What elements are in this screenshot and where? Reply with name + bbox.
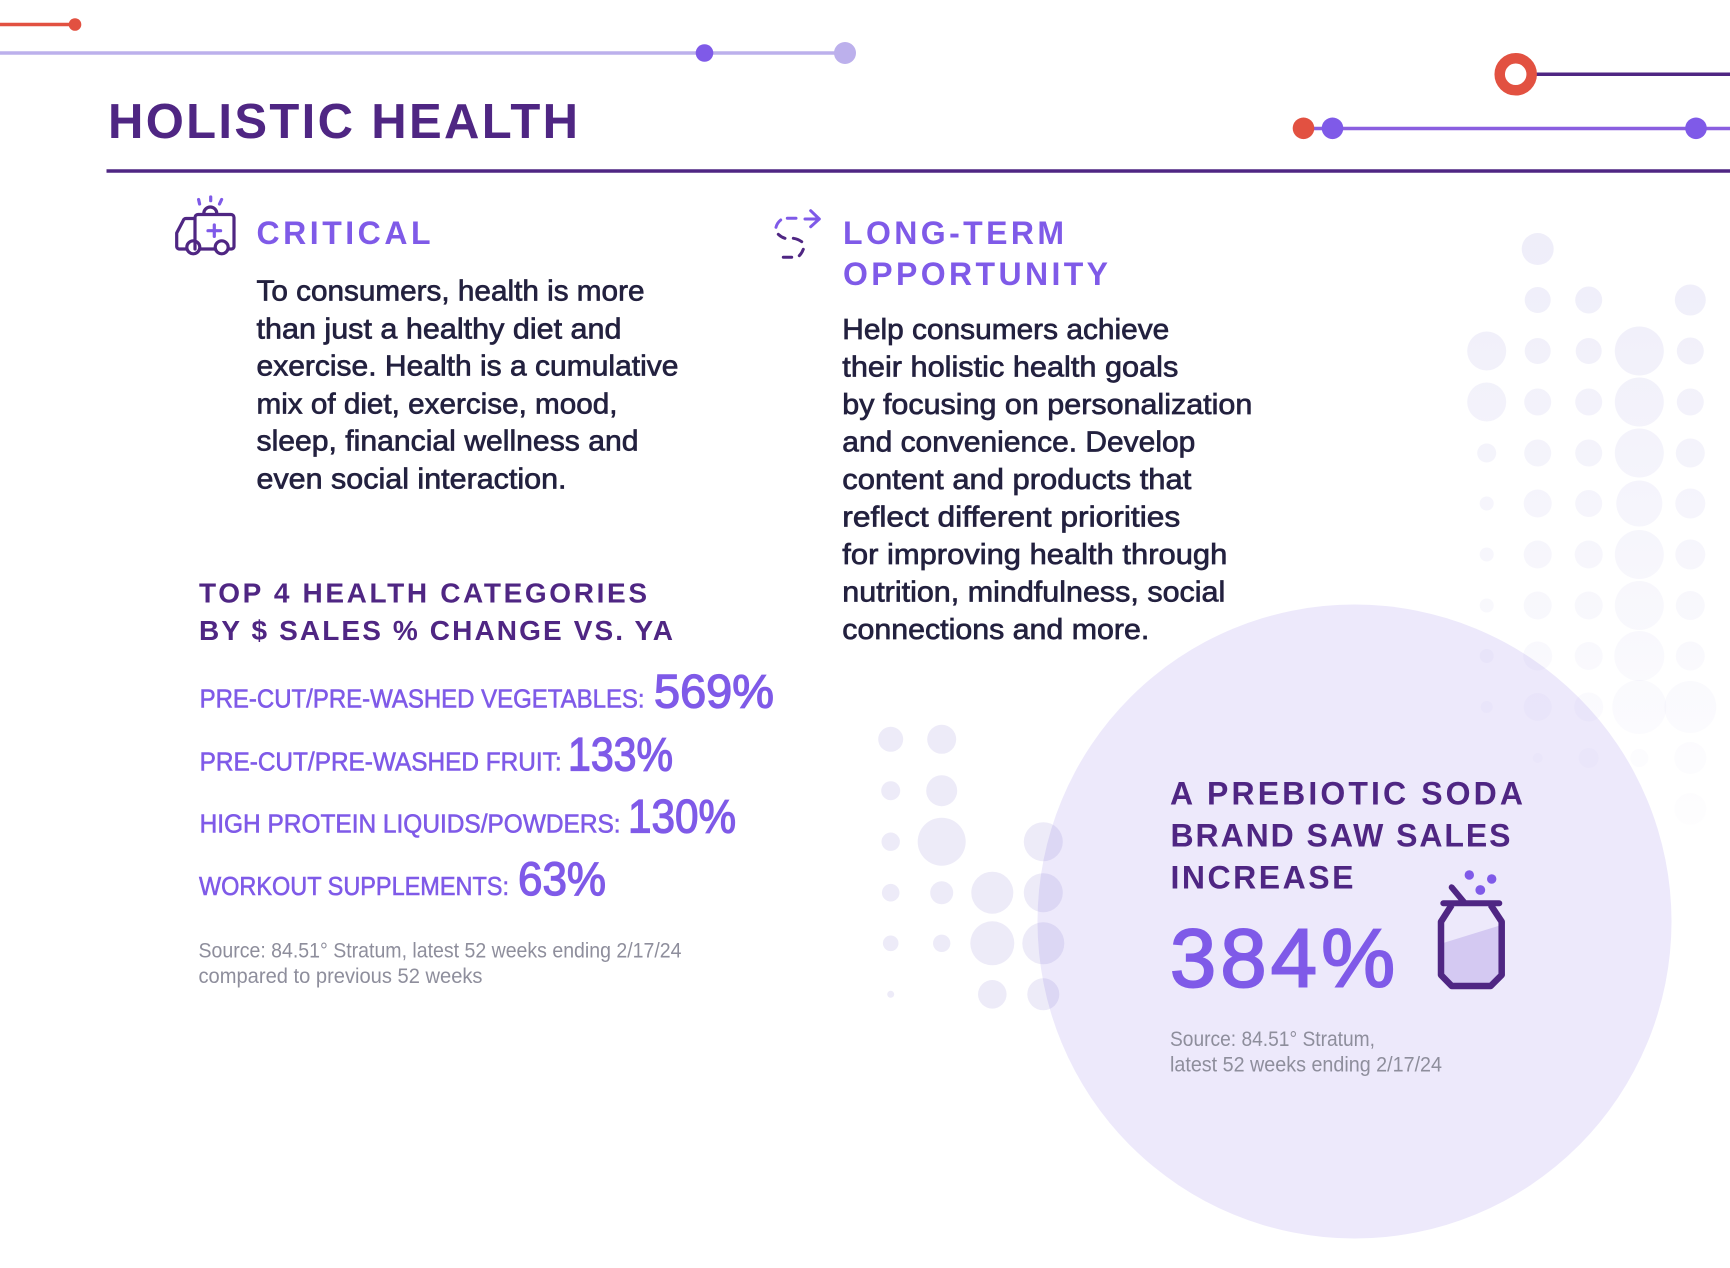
- text block: long-term opportunity: nutrition, mindfulness, social: [842, 576, 1225, 608]
- callout heading: BRAND SAW SALES: [1170, 818, 1510, 854]
- source note: [198, 940, 682, 988]
- text block: long-term opportunity: connections and more.: [842, 614, 1149, 646]
- decorative dot grid: right: [1467, 233, 1716, 825]
- heading: long-term opportunity: [843, 215, 1108, 292]
- callout source note: latest 52 weeks ending 2/17/24: [1170, 1054, 1442, 1077]
- source note: compared to previous 52 weeks: [198, 965, 482, 988]
- icon: ambulance: [177, 197, 234, 254]
- callout circle background: [1038, 604, 1672, 1238]
- heading: critical: CRITICAL: [256, 215, 430, 251]
- text block: critical: To consumers, health is more: [256, 276, 644, 308]
- callout: prebiotic soda: [1170, 776, 1523, 1077]
- text block: long-term opportunity: for improving health through: [842, 539, 1227, 571]
- title divider: [106, 169, 1730, 173]
- text block: critical: [256, 276, 678, 495]
- stat: workout supplements 63%: 63%: [518, 852, 606, 905]
- heading: top 4 health categories: BY $ SALES % CHANGE VS. YA: [199, 615, 673, 646]
- decorative dot grid: centre: [878, 725, 1064, 1010]
- title: HOLISTIC HEALTH: [108, 95, 578, 149]
- heading: top 4 health categories: TOP 4 HEALTH CATEGORIES: [199, 578, 647, 609]
- text block: critical: exercise. Health is a cumulative: [256, 351, 678, 383]
- callout heading: [1170, 776, 1523, 896]
- stat: fruit 133%: PRE-CUT/PRE-WASHED FRUIT:: [200, 747, 562, 777]
- top-left timeline decoration: [0, 18, 856, 64]
- text block: long-term opportunity: reflect different priorities: [842, 502, 1180, 534]
- stat: vegetables 569%: PRE-CUT/PRE-WASHED VEGETABLES:: [200, 684, 645, 714]
- source note: Source: 84.51° Stratum, latest 52 weeks ending 2/17/24: [198, 940, 682, 963]
- stat: vegetables 569%: 569%: [654, 665, 774, 718]
- icon: soda jar: [1441, 870, 1502, 986]
- panel: top 4 health categories: [198, 578, 774, 988]
- text block: long-term opportunity: Help consumers achieve: [842, 314, 1169, 346]
- stat: protein 130%: HIGH PROTEIN LIQUIDS/POWDERS:: [200, 809, 621, 839]
- panel: long-term opportunity: [776, 211, 1252, 646]
- stat: fruit 133%: 133%: [568, 728, 673, 781]
- stat: vegetables 569%: [200, 665, 774, 718]
- heading: long-term opportunity: LONG-TERM: [843, 215, 1064, 251]
- text block: critical: even social interaction.: [256, 463, 566, 495]
- text block: long-term opportunity: their holistic health goals: [842, 352, 1178, 384]
- text block: long-term opportunity: by focusing on personalization: [842, 389, 1252, 421]
- text block: critical: sleep, financial wellness and: [256, 426, 638, 458]
- text block: critical: mix of diet, exercise, mood,: [256, 388, 618, 420]
- text block: long-term opportunity: content and products that: [842, 464, 1191, 496]
- panel: critical: [177, 197, 678, 495]
- stat: workout supplements 63%: [199, 852, 606, 905]
- stat: protein 130%: 130%: [628, 790, 736, 843]
- icon: dashed path arrow: [776, 211, 819, 257]
- big number 384%: 384%: [1170, 912, 1395, 1005]
- text block: long-term opportunity: and convenience. Develop: [842, 426, 1195, 458]
- heading: long-term opportunity: OPPORTUNITY: [843, 256, 1108, 292]
- callout heading: A PREBIOTIC SODA: [1170, 776, 1523, 812]
- text block: critical: than just a healthy diet and: [256, 313, 622, 345]
- text block: long-term opportunity: [842, 314, 1252, 646]
- top-right timeline decoration: [1293, 58, 1730, 139]
- stat: fruit 133%: [200, 728, 673, 781]
- callout heading: INCREASE: [1170, 860, 1354, 896]
- callout source note: Source: 84.51° Stratum,: [1170, 1028, 1375, 1051]
- heading: top 4 health categories: [199, 578, 673, 646]
- callout source note: [1170, 1028, 1442, 1077]
- stat: workout supplements 63%: WORKOUT SUPPLEMENTS:: [199, 871, 509, 901]
- stat: protein 130%: [200, 790, 736, 843]
